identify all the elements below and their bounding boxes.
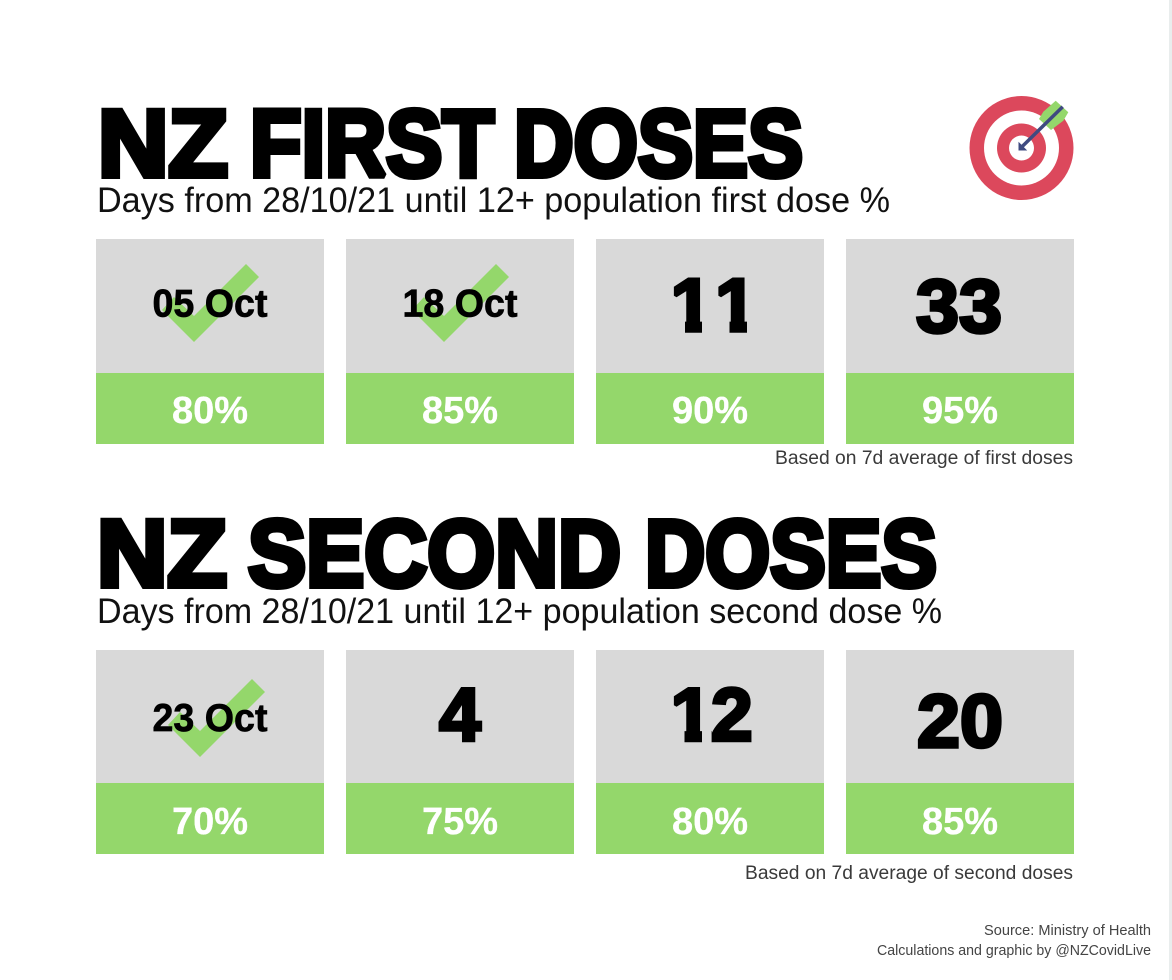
title: NZ second doses — [97, 501, 937, 607]
card: first dose 80%: 80% — [172, 390, 248, 432]
card: second dose 80%: 80% — [672, 801, 748, 843]
card: second dose 75%: 4 — [439, 672, 481, 756]
title: NZ first doses: FIRST — [250, 91, 494, 197]
source credit — [877, 923, 1151, 959]
title: NZ first doses: DOSES — [514, 91, 803, 197]
card: first dose 80%: 05 Oct — [152, 282, 268, 326]
subtitle: second dose: Days from 28/10/21 until 12+ population second dose % — [97, 592, 942, 631]
card: first dose 80% — [96, 239, 324, 444]
card: second dose 70% — [96, 650, 324, 854]
title: NZ second doses: DOSES — [645, 501, 937, 607]
card: first dose 85%: 85% — [422, 390, 498, 432]
card: second dose 85%: 20 — [917, 679, 1003, 763]
card: second dose 75%: 75% — [422, 801, 498, 843]
title: NZ second doses: NZ — [97, 501, 227, 607]
card: second dose 85%: 85% — [922, 801, 998, 843]
title: NZ first doses: NZ — [98, 91, 228, 197]
card: first dose 85%: 18 Oct — [402, 282, 518, 326]
card: second dose 80%: 12 — [670, 672, 753, 756]
note: second doses basis: Based on 7d average of second doses — [745, 863, 1073, 884]
card: first dose 90%: 90% — [672, 390, 748, 432]
card: second dose 85% — [846, 650, 1074, 854]
subtitle: first dose: Days from 28/10/21 until 12+ population first dose % — [97, 181, 890, 220]
title: NZ first doses — [98, 91, 803, 197]
card: first dose 95%: 33 — [916, 264, 1002, 348]
card: second dose 70%: 70% — [172, 801, 248, 843]
title: NZ second doses: SECOND — [248, 501, 621, 607]
icon: target with arrow — [970, 96, 1074, 200]
card: first dose 90% — [596, 239, 824, 444]
card: second dose 75% — [346, 650, 574, 854]
note: first doses basis: Based on 7d average of first doses — [775, 448, 1073, 469]
card: second dose 80% — [596, 650, 824, 854]
card: first dose 95%: 95% — [922, 390, 998, 432]
card: first dose 95% — [846, 239, 1074, 444]
card: first dose 90%: 11 — [670, 263, 757, 347]
source credit: Source: Ministry of Health — [984, 923, 1151, 939]
card: first dose 85% — [346, 239, 574, 444]
card: second dose 70%: 23 Oct — [152, 697, 268, 740]
source credit: Calculations and graphic by @NZCovidLive — [877, 943, 1151, 959]
